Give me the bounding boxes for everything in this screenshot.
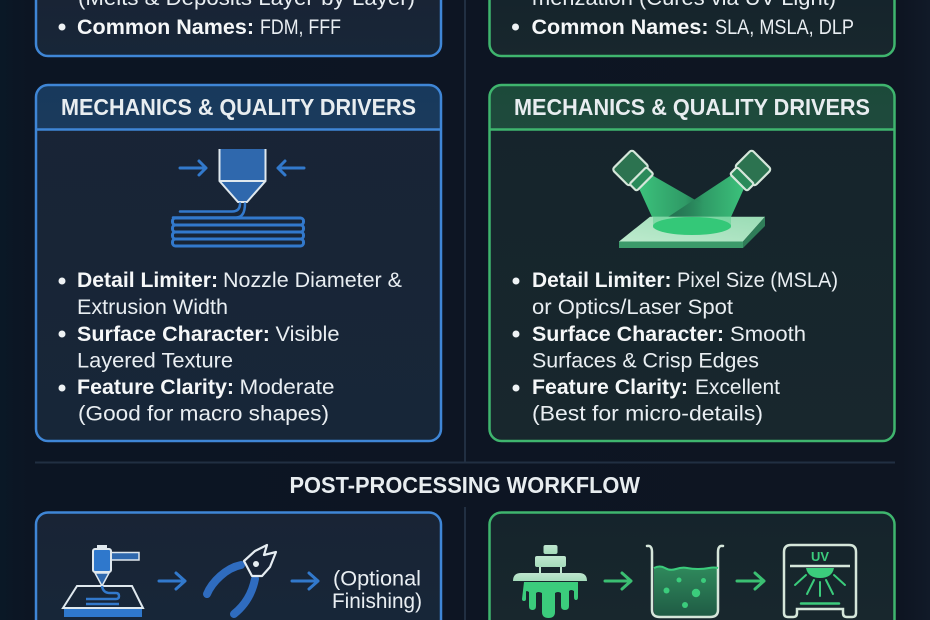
bullet: feature clarity: Feature Clarity: — [77, 376, 234, 399]
bullet: detail limiter — [512, 269, 838, 319]
bullet: detail limiter — [58, 269, 402, 319]
bullet: surface character: Surface Character: — [532, 323, 724, 346]
bullet: surface character — [512, 323, 806, 372]
bullet: feature clarity: Feature Clarity: — [532, 376, 688, 399]
panel: FDM post-processing — [36, 512, 441, 620]
bullet: detail limiter: Detail Limiter: — [77, 269, 218, 292]
bullet: FDM common names: FDM, FFF — [260, 16, 341, 39]
icon: build plate dripping resin — [513, 545, 587, 618]
bullet: resin common names: Common Names: — [532, 16, 708, 39]
bullet: detail limiter: Detail Limiter: — [532, 269, 672, 292]
heading: FDM mechanics: MECHANICS & QUALITY DRIVERS — [61, 94, 416, 120]
panel: resin post-processing — [490, 512, 894, 620]
bullet: surface character — [58, 323, 340, 372]
arrow — [292, 573, 318, 589]
icon: flush cutters — [207, 545, 276, 614]
bullet: surface character: Smooth — [730, 323, 806, 346]
arrow — [159, 573, 185, 589]
bullet: FDM common names: Common Names: — [77, 16, 254, 39]
bullet: detail limiter: Nozzle Diameter & — [223, 269, 402, 292]
bullet: feature clarity — [512, 376, 780, 426]
bullet: detail limiter: or Optics/Laser Spot — [532, 296, 733, 319]
icon: wash beaker — [647, 546, 723, 617]
heading: post-processing workflow: POST-PROCESSING WORKFLOW — [290, 472, 640, 498]
icon: UV curing chamber — [784, 545, 856, 617]
icon: twin UV light sources over build plate — [612, 150, 771, 248]
icon: FDM printer — [63, 545, 143, 617]
bullet: feature clarity — [58, 376, 334, 426]
panel: resin mechanics and quality drivers — [490, 85, 894, 441]
bullet: detail limiter: Extrusion Width — [77, 296, 228, 319]
bullet: surface character: Surfaces & Crisp Edges — [532, 350, 759, 372]
arrow — [737, 573, 764, 589]
panel: FDM mechanics and quality drivers — [36, 85, 441, 441]
bullet: feature clarity: Moderate — [240, 376, 334, 399]
bullet: resin common names: SLA, MSLA, DLP — [715, 16, 854, 39]
icon: UV curing chamber: UV — [811, 550, 830, 564]
optional finishing label: Finishing) — [332, 590, 422, 613]
bullet: surface character: Surface Character: — [77, 323, 270, 346]
bullet: detail limiter: Pixel Size (MSLA) — [677, 269, 838, 292]
arrow — [605, 573, 631, 589]
heading: resin mechanics: MECHANICS & QUALITY DRIVERS — [514, 94, 870, 120]
bullet: feature clarity: (Good for macro shapes) — [78, 402, 329, 426]
bullet: feature clarity: (Best for micro-details) — [532, 402, 763, 426]
bullet: surface character: Visible — [276, 323, 340, 346]
panel: FDM overview — [36, 0, 441, 56]
optional finishing label — [332, 568, 422, 613]
bullet: surface character: Layered Texture — [77, 350, 233, 372]
optional finishing label: (Optional — [333, 568, 421, 591]
bullet: resin common names — [512, 16, 854, 39]
icon: nozzle with extruded layers — [172, 149, 304, 246]
panel: resin overview — [490, 0, 894, 56]
bullet: FDM common names — [58, 16, 341, 39]
bullet: feature clarity: Excellent — [695, 376, 780, 399]
